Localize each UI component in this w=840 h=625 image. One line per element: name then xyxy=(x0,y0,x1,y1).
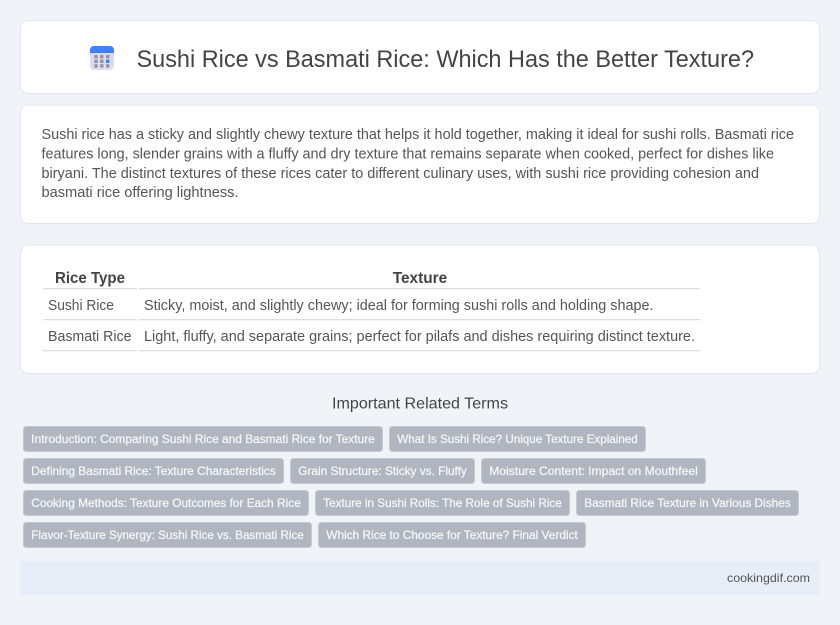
tag: What Is Sushi Rice? Unique Texture Explained xyxy=(397,432,638,446)
tag xyxy=(318,522,586,548)
tag: Basmati Rice Texture in Various Dishes xyxy=(584,496,791,510)
table row: sushi rice: Sticky, moist, and slightly chewy; ideal for forming sushi rolls and holding shape. xyxy=(144,298,654,314)
tag xyxy=(24,522,312,548)
tag xyxy=(24,458,284,484)
tag: Defining Basmati Rice: Texture Characteristics xyxy=(31,464,276,478)
table row: basmati rice: Basmati Rice xyxy=(48,329,132,345)
heading: related terms: Important Related Terms xyxy=(332,396,508,412)
tag: Moisture Content: Impact on Mouthfeel xyxy=(489,464,698,478)
tag xyxy=(24,426,382,452)
table header row: Rice Type xyxy=(55,270,125,287)
panel: summary paragraph: basmati rice offering lightness. xyxy=(42,185,238,201)
panel: comparison table xyxy=(20,245,820,374)
panel: summary paragraph: biryani. The distinct textures of these rices cater to different culinary uses, with sushi rice providing cohesion and xyxy=(42,166,759,182)
tag xyxy=(316,490,570,516)
header panel xyxy=(20,20,820,94)
tag xyxy=(390,426,646,452)
icon: calendar grid xyxy=(90,46,114,70)
footer: cookingdif.com xyxy=(727,571,810,585)
table header row: Texture xyxy=(393,270,447,287)
tag: Grain Structure: Sticky vs. Fluffy xyxy=(298,464,467,478)
table row: basmati rice: Light, fluffy, and separate grains; perfect for pilafs and dishes requiring distinct texture. xyxy=(144,329,695,345)
tag: Which Rice to Choose for Texture? Final Verdict xyxy=(326,528,578,542)
table row: sushi rice: Sushi Rice xyxy=(48,298,114,314)
tag xyxy=(576,490,798,516)
tag: Introduction: Comparing Sushi Rice and Basmati Rice for Texture xyxy=(31,432,375,446)
table row: sushi rice xyxy=(43,298,700,320)
related term tags xyxy=(24,426,798,548)
footer xyxy=(20,561,820,595)
tag: Texture in Sushi Rolls: The Role of Sushi Rice xyxy=(323,496,562,510)
panel: summary paragraph: Sushi rice has a sticky and slightly chewy texture that helps it hold together, making it ideal for sushi rolls. Basmati rice xyxy=(42,127,794,143)
tag: Cooking Methods: Texture Outcomes for Each Rice xyxy=(31,496,301,510)
table row: basmati rice xyxy=(43,329,700,351)
table header row xyxy=(43,270,700,289)
tag: Flavor-Texture Synergy: Sushi Rice vs. Basmati Rice xyxy=(31,528,304,542)
panel: summary paragraph xyxy=(20,105,820,224)
title: Sushi Rice vs Basmati Rice: Which Has the Better Texture? xyxy=(136,46,754,73)
panel: summary paragraph: features long, slender grains with a fluffy and dry texture that remains separate when cooked, perfect for dishes like xyxy=(42,146,774,162)
tag xyxy=(482,458,706,484)
tag xyxy=(290,458,474,484)
tag xyxy=(24,490,308,516)
